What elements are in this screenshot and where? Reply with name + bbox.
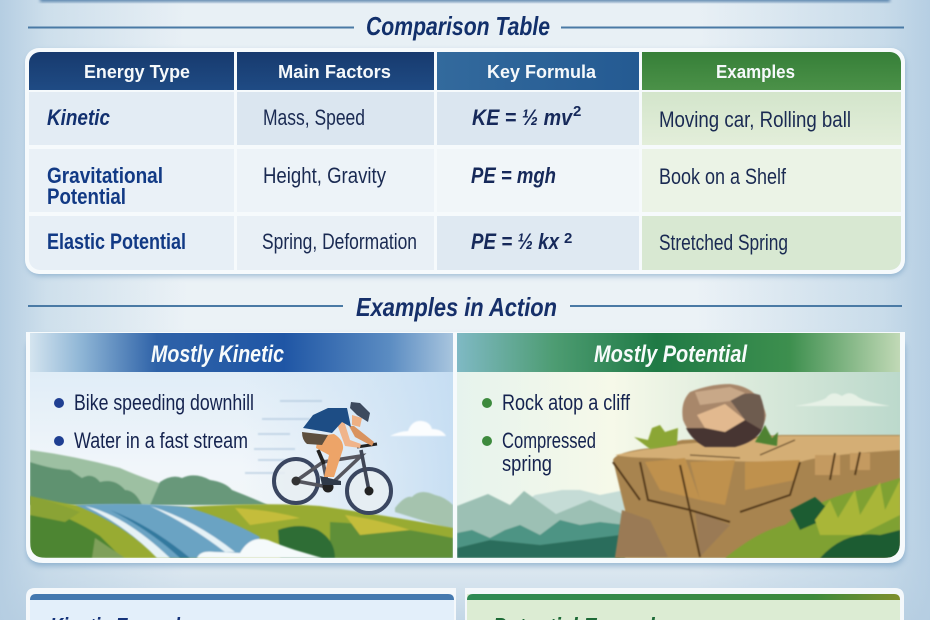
illustration: cyclist xyxy=(274,402,391,513)
potential bullet list: spring xyxy=(502,451,552,476)
card: Kinetic Examples (cropped) xyxy=(26,588,456,620)
illustration: mountains and treeline xyxy=(457,490,625,558)
bike frame xyxy=(296,444,377,491)
panel header: Mostly Kinetic: Mostly Kinetic xyxy=(151,341,284,368)
heading: Comparison Table: Comparison Table xyxy=(366,11,550,41)
row: Gravitational Potential: Potential xyxy=(47,184,126,209)
table header row: Key Formula xyxy=(487,62,597,82)
panel header: Mostly Potential xyxy=(457,333,900,372)
bike wheels xyxy=(274,459,391,513)
row: Gravitational Potential: PE = mgh xyxy=(471,163,556,188)
row: Elastic Potential: 2 xyxy=(564,230,572,247)
panel above, cropped at top edge xyxy=(40,0,890,2)
potential bullet list: Compressed xyxy=(502,428,596,453)
rider leg xyxy=(316,434,343,477)
potential bullet list: Rock atop a cliff xyxy=(502,390,631,415)
row: Elastic Potential: Elastic Potential xyxy=(47,229,186,254)
illustration: bushes on cliff xyxy=(634,425,900,558)
rider near arm xyxy=(337,421,361,448)
illustration: boulder on cliff xyxy=(682,384,766,447)
row: Kinetic: KE = ½ mv xyxy=(472,105,574,130)
illustration: cloud xyxy=(390,421,446,436)
kinetic bullet list xyxy=(54,394,253,448)
row: Elastic Potential: PE = ½ kx xyxy=(471,229,560,254)
kinetic bullet list: Water in a fast stream xyxy=(74,428,248,453)
illustration: cliff xyxy=(613,435,900,558)
rider jersey xyxy=(303,408,351,433)
panel: Mostly Potential xyxy=(457,333,900,558)
row: Gravitational Potential: Height, Gravity xyxy=(263,163,386,188)
potential bullet list xyxy=(482,390,631,476)
row: Gravitational Potential: Gravitational xyxy=(47,163,163,188)
row: Gravitational Potential xyxy=(29,149,901,212)
rider head and helmet xyxy=(352,415,362,427)
row: Kinetic: Moving car, Rolling ball xyxy=(659,107,851,132)
table header row: Main Factors xyxy=(278,62,391,82)
row: Kinetic: 2 xyxy=(573,103,581,120)
heading: Examples in Action: Examples in Action xyxy=(356,292,557,322)
kinetic bullet list: Bike speeding downhill xyxy=(74,390,254,415)
row: Kinetic: Kinetic xyxy=(47,105,110,130)
table header row: Energy Type xyxy=(84,62,190,82)
row: Gravitational Potential: Book on a Shelf xyxy=(659,164,787,189)
table header row: Examples xyxy=(716,62,795,82)
panel: Mostly Kinetic xyxy=(30,333,453,558)
table header row xyxy=(29,52,901,90)
illustration: background hills and trees xyxy=(30,450,453,530)
rider shorts xyxy=(302,432,328,445)
row: Elastic Potential: Stretched Spring xyxy=(659,230,788,255)
rider far arm xyxy=(349,426,374,446)
card: Potential Examples (cropped) xyxy=(465,588,904,620)
illustration: cloud xyxy=(795,393,890,406)
panel header: Mostly Potential: Mostly Potential xyxy=(594,341,748,368)
illustration: stream xyxy=(75,504,322,558)
row: Kinetic: Mass, Speed xyxy=(263,105,365,130)
row: Elastic Potential xyxy=(29,216,901,270)
comparison table xyxy=(25,48,905,276)
examples frame xyxy=(26,332,905,566)
row: Elastic Potential: Spring, Deformation xyxy=(262,229,417,254)
panel header: Mostly Kinetic xyxy=(30,333,453,372)
row: Kinetic xyxy=(29,92,901,145)
illustration: grassy hill xyxy=(30,496,453,558)
illustration: speed lines xyxy=(245,401,322,473)
